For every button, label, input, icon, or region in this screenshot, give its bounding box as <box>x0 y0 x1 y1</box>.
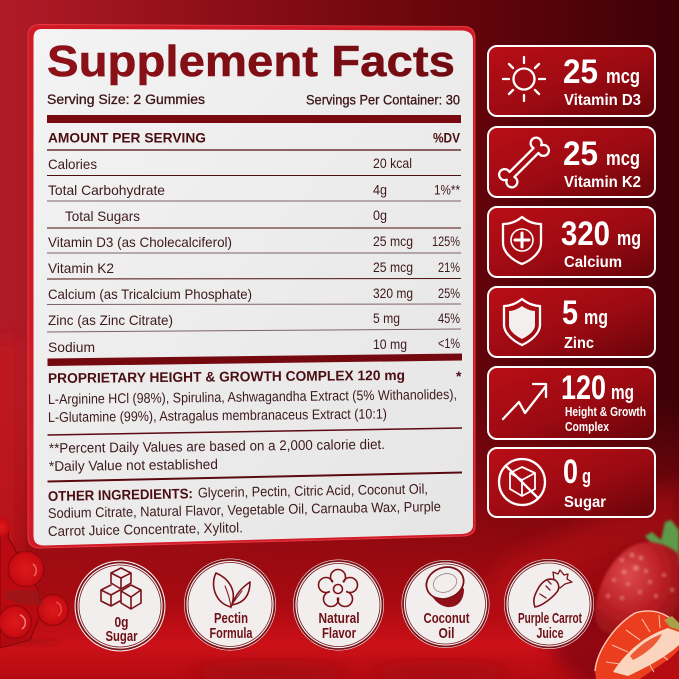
row: zinc <box>48 310 460 328</box>
thick divider <box>48 354 462 366</box>
badge: natural flavor <box>293 560 384 650</box>
nutrition table <box>47 115 461 355</box>
row: vitamin k2: 25 mcg <box>373 259 413 275</box>
row: sodium: Sodium <box>48 339 95 355</box>
badge: 0g sugar: 0g <box>114 614 128 631</box>
card: calcium: 320 <box>561 215 610 253</box>
row: sodium <box>48 335 460 355</box>
proprietary complex: L-Arginine HCl (98%), Spirulina, Ashwagandha Extract (5% Withanolides), <box>48 386 457 407</box>
card: zinc <box>488 287 655 357</box>
other ingredients: Carrot Juice Concentrate, Xylitol. <box>48 519 243 539</box>
card: calcium: Calcium <box>564 254 622 271</box>
icon: leaves <box>214 573 250 608</box>
other ingredients <box>48 480 441 539</box>
badge: pectin formula: Formula <box>210 625 253 642</box>
card: vitamin d3: mcg <box>606 66 640 88</box>
row: calories: Calories <box>48 156 97 172</box>
badge: pectin formula <box>184 558 276 650</box>
icon: sun <box>503 57 545 101</box>
card: height and growth complex <box>488 367 655 439</box>
proprietary complex: L-Glutamine (99%), Astragalus membranaceus Extract (10:1) <box>48 405 387 425</box>
row: total carbohydrate: 1%** <box>434 182 460 198</box>
card: calcium <box>488 207 655 277</box>
row: total sugars <box>65 207 387 224</box>
proprietary complex: PROPRIETARY HEIGHT & GROWTH COMPLEX 120 mg <box>48 367 405 386</box>
proprietary complex: * <box>456 368 462 384</box>
badge: purple carrot juice: Juice <box>536 625 564 642</box>
illustration: gummy bear <box>0 518 68 648</box>
icon: no sugar cube <box>499 459 545 505</box>
row: calories <box>48 155 412 172</box>
card: vitamin k2: Vitamin K2 <box>564 174 641 191</box>
badge: purple carrot juice <box>504 559 594 649</box>
row: vitamin k2: 21% <box>438 259 460 275</box>
row: calcium: 25% <box>438 285 460 301</box>
card: vitamin k2: mcg <box>606 148 640 170</box>
card: height and growth complex: Complex <box>565 419 610 434</box>
badge: 0g sugar <box>74 560 166 652</box>
row: total sugars: Total Sugars <box>65 208 140 224</box>
icon: sugar cubes <box>101 568 141 609</box>
badge: purple carrot juice: Purple Carrot <box>518 610 582 627</box>
row: total carbohydrate: Total Carbohydrate <box>48 182 165 198</box>
row: total carbohydrate <box>48 182 460 198</box>
card: sugar: Sugar <box>564 494 606 511</box>
badge: coconut oil: Oil <box>438 625 454 642</box>
proprietary complex <box>48 367 462 425</box>
card: height and growth complex: mg <box>611 382 634 404</box>
other ingredients: Glycerin, Pectin, Citric Acid, Coconut Oil, <box>198 480 428 500</box>
row: vitamin d3: 125% <box>432 233 460 249</box>
row: sodium: <1% <box>438 335 460 351</box>
row: vitamin d3: Vitamin D3 (as Cholecalciferol) <box>48 234 232 250</box>
serving info: Servings Per Container: 30 <box>306 92 460 108</box>
badge: natural flavor: Natural <box>318 610 360 627</box>
icon: growth arrow <box>503 384 546 419</box>
card: vitamin d3 <box>488 46 655 116</box>
nutrition table: AMOUNT PER SERVING <box>48 130 206 146</box>
icon: coconut <box>422 562 468 607</box>
nutrition table: %DV <box>433 130 461 146</box>
card: sugar <box>488 448 655 517</box>
row: sodium: 10 mg <box>373 336 407 352</box>
row: vitamin d3: 25 mcg <box>373 233 413 249</box>
card: sugar: 0 <box>563 453 578 491</box>
icon: flower <box>318 570 358 606</box>
serving info <box>47 92 460 108</box>
footnotes: **Percent Daily Values are based on a 2,000 calorie diet. <box>49 436 385 456</box>
row: vitamin k2 <box>48 259 460 276</box>
icon: shield <box>504 299 540 345</box>
row: calcium <box>48 285 460 302</box>
card: height and growth complex: Height & Growth <box>565 404 646 419</box>
card: height and growth complex: 120 <box>561 369 606 407</box>
card: vitamin d3: 25 <box>563 53 598 91</box>
other ingredients: Sodium Citrate, Natural Flavor, Vegetable Oil, Carnauba Wax, Purple <box>48 498 441 521</box>
badge: 0g sugar: Sugar <box>106 628 138 645</box>
row: calcium: Calcium (as Tricalcium Phosphate) <box>48 286 252 302</box>
row: calories: 20 kcal <box>373 155 412 171</box>
card: vitamin d3: Vitamin D3 <box>564 92 641 109</box>
row: calcium: 320 mg <box>373 285 413 301</box>
badge: coconut oil <box>402 560 490 648</box>
icon: bone <box>497 135 551 190</box>
row: zinc: 45% <box>438 310 460 326</box>
row: zinc: Zinc (as Zinc Citrate) <box>48 312 173 328</box>
footnotes: *Daily Value not established <box>49 456 218 474</box>
footnotes <box>49 436 385 474</box>
panel: supplement facts <box>28 24 475 548</box>
card: vitamin k2: 25 <box>563 135 598 173</box>
row: zinc: 5 mg <box>373 310 400 326</box>
title: Supplement Facts <box>47 37 455 86</box>
icon: shield with plus <box>503 217 541 264</box>
card: vitamin k2 <box>488 127 655 197</box>
badge: natural flavor: Flavor <box>322 625 356 642</box>
row: vitamin d3 <box>48 233 460 250</box>
icon: carrot <box>534 570 572 607</box>
card: zinc: mg <box>584 307 608 329</box>
card: zinc: 5 <box>562 294 578 332</box>
illustration: strawberries <box>595 520 679 679</box>
badge: pectin formula: Pectin <box>214 610 248 627</box>
badge: coconut oil: Coconut <box>424 610 470 627</box>
card: calcium: mg <box>617 228 641 250</box>
row: total carbohydrate: 4g <box>373 182 387 198</box>
serving info: Serving Size: 2 Gummies <box>47 92 205 107</box>
card: zinc: Zinc <box>564 335 594 352</box>
row: vitamin k2: Vitamin K2 <box>48 260 114 276</box>
other ingredients: OTHER INGREDIENTS: <box>48 485 193 504</box>
row: total sugars: 0g <box>373 207 387 223</box>
card: sugar: g <box>582 466 591 488</box>
